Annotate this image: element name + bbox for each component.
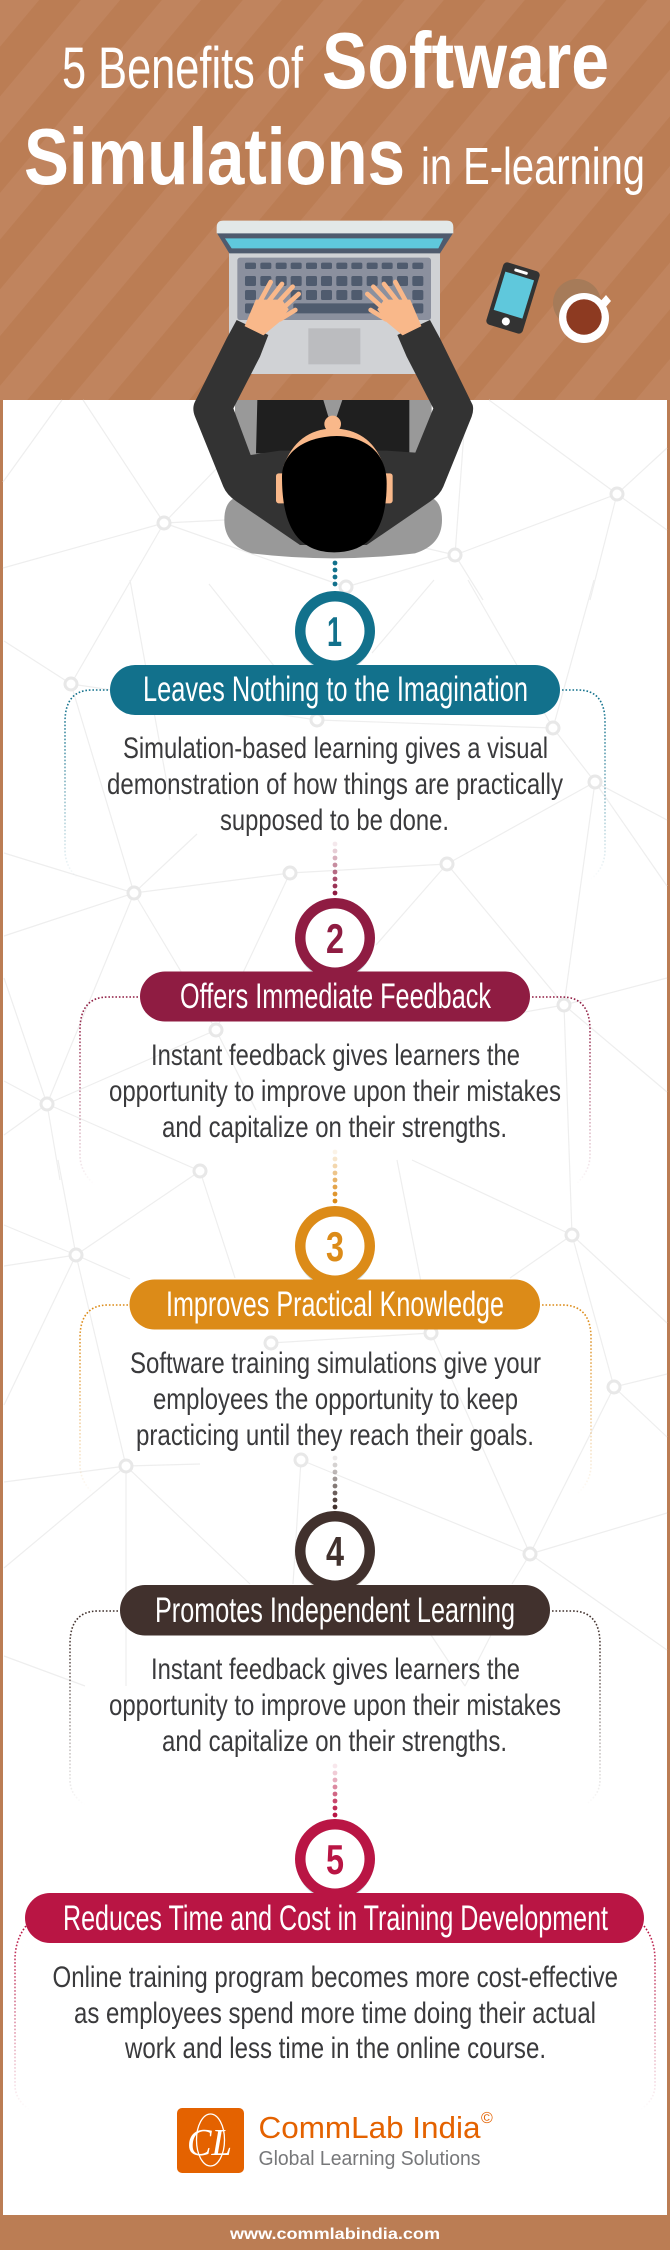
- title: [24, 16, 645, 201]
- logo: [177, 2108, 493, 2173]
- body text 3: practicing until they reach their goals.: [136, 1419, 534, 1452]
- body text 3: Software training simulations give your: [130, 1347, 541, 1380]
- connector dots 5: [333, 1764, 337, 1817]
- connector dots 4: [333, 1456, 337, 1509]
- connector dots 1: [333, 561, 337, 586]
- bracket 4: [70, 1611, 600, 1805]
- number badge 1: 1: [327, 608, 342, 655]
- icon: laptop: [217, 221, 453, 374]
- heading pill 2: [140, 972, 530, 1022]
- heading pill 2: Offers Immediate Feedback: [180, 977, 491, 1016]
- number badge 5: 5: [326, 1836, 344, 1883]
- hair: [282, 436, 387, 552]
- number badge 5: [295, 1819, 375, 1901]
- body text 4: and capitalize on their strengths.: [162, 1725, 507, 1758]
- heading pill 4: [120, 1585, 550, 1636]
- chair: [224, 400, 442, 558]
- body text 1: demonstration of how things are practically: [107, 768, 563, 801]
- title: 5 Benefits of: [62, 36, 304, 101]
- body text 4: [109, 1653, 561, 1758]
- copyright mark: ©: [481, 2110, 493, 2127]
- number badge 4: 4: [326, 1528, 344, 1575]
- body text 1: [107, 732, 563, 837]
- number badge 2: 2: [326, 915, 344, 962]
- jacket and arms: [193, 320, 473, 545]
- number badge 2: [295, 898, 375, 980]
- header panel with diagonal stripes: [0, 0, 670, 400]
- title: Software: [322, 16, 609, 105]
- title: Simulations: [24, 112, 405, 201]
- icon: coffee cup: [553, 279, 611, 343]
- body text 3: [130, 1347, 541, 1452]
- footer url: www.commlabindia.com: [229, 2226, 440, 2243]
- number badge 3: [295, 1206, 375, 1288]
- background network pattern: [3, 400, 667, 1686]
- legs: [256, 400, 409, 453]
- body text 5: work and less time in the online course.: [124, 2032, 546, 2065]
- icon: phone: [485, 261, 541, 335]
- white content panel: [3, 400, 667, 2215]
- bracket 2: [80, 997, 590, 1185]
- icon: person seen from above: [193, 282, 473, 558]
- heading pill 3: Improves Practical Knowledge: [166, 1285, 504, 1324]
- logo mark: CL: [187, 2122, 232, 2164]
- step 5: [15, 1819, 655, 2110]
- number badge 1: [295, 591, 375, 673]
- body text 2: [109, 1039, 561, 1144]
- body text 4: opportunity to improve upon their mistakes: [109, 1689, 561, 1722]
- connector dots 2: [333, 842, 337, 895]
- step 1: [65, 591, 605, 880]
- logo mark: [177, 2108, 244, 2173]
- logo tagline: Global Learning Solutions: [258, 2148, 480, 2170]
- body text 2: and capitalize on their strengths.: [162, 1111, 507, 1144]
- body text 3: employees the opportunity to keep: [153, 1383, 518, 1416]
- body text 1: supposed to be done.: [220, 804, 449, 837]
- body text 4: Instant feedback gives learners the: [151, 1653, 520, 1686]
- number badge 3: 3: [326, 1223, 344, 1270]
- hands: [245, 282, 421, 335]
- body text 2: opportunity to improve upon their mistakes: [109, 1075, 561, 1108]
- step 2: [80, 898, 590, 1185]
- bracket 3: [80, 1305, 591, 1495]
- bracket 5: [15, 1926, 655, 2110]
- body text 2: Instant feedback gives learners the: [151, 1039, 520, 1072]
- heading pill 3: [130, 1280, 540, 1330]
- logo wordmark: CommLab India: [258, 2110, 481, 2145]
- step 3: [80, 1206, 591, 1495]
- heading pill 1: [110, 665, 560, 715]
- number badge 4: [295, 1511, 375, 1593]
- heading pill 4: Promotes Independent Learning: [155, 1591, 515, 1630]
- heading pill 1: Leaves Nothing to the Imagination: [143, 670, 528, 709]
- step 4: [70, 1511, 600, 1805]
- body text 1: Simulation-based learning gives a visual: [123, 732, 548, 765]
- neck and head skin: [276, 416, 393, 503]
- connector dots 3: [333, 1150, 337, 1203]
- bracket 1: [65, 690, 605, 880]
- body text 5: [52, 1961, 618, 2065]
